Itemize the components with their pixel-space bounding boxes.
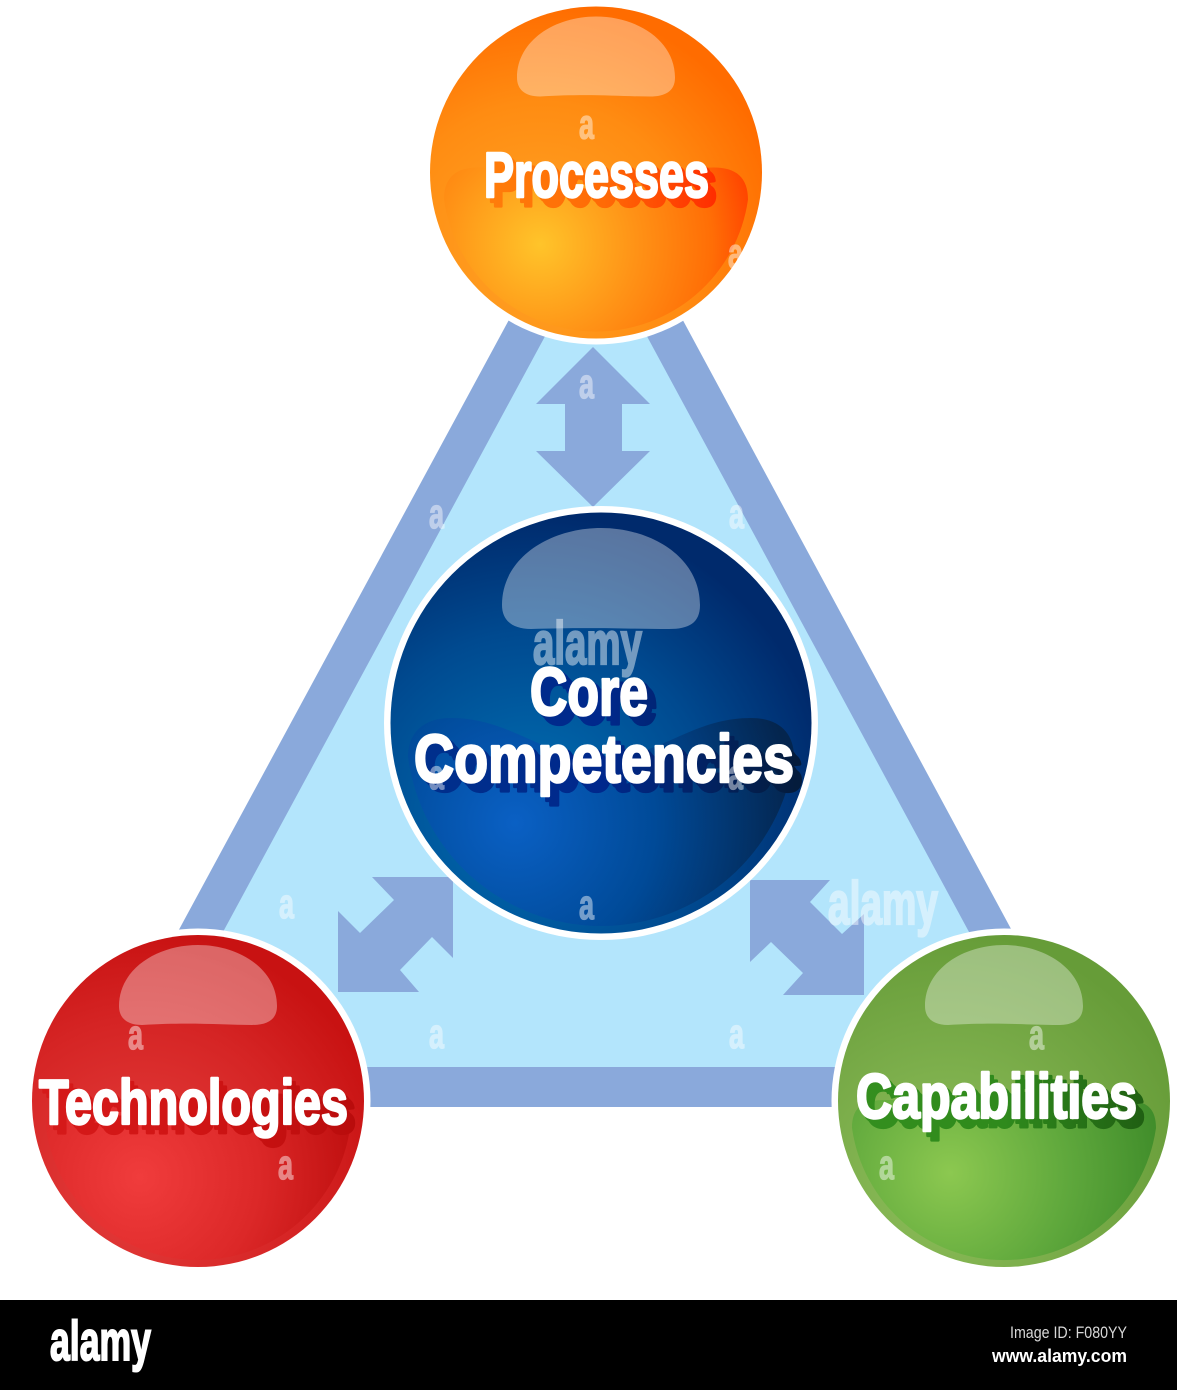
watermarks on triangle: a bbox=[429, 1010, 444, 1057]
footer bar: Image ID: F080YY bbox=[1010, 1323, 1127, 1342]
circle: core competencies: alamy bbox=[533, 610, 642, 677]
footer bar bbox=[0, 1300, 1177, 1390]
watermarks on triangle: alamy bbox=[828, 870, 938, 937]
watermarks on triangle: a bbox=[729, 1010, 744, 1057]
circle: technologies: a bbox=[128, 1011, 143, 1058]
heading: processes: Processes bbox=[488, 144, 713, 216]
circle: core competencies: a bbox=[579, 881, 594, 928]
heading: processes: Processes bbox=[484, 139, 709, 211]
heading: technologies: Technologies bbox=[39, 1068, 348, 1138]
watermarks on triangle: a bbox=[279, 880, 294, 927]
circle: technologies: a bbox=[278, 1141, 293, 1188]
arrow: processes to core bbox=[536, 347, 650, 507]
footer bar: alamy bbox=[50, 1309, 151, 1372]
footer bar: www.alamy.com bbox=[991, 1346, 1127, 1366]
watermarks on triangle: a bbox=[429, 490, 444, 537]
heading: core competencies: Core bbox=[530, 654, 648, 730]
circle: capabilities: a bbox=[879, 1141, 894, 1188]
arrow: capabilities to core bbox=[750, 880, 864, 995]
heading: core competencies bbox=[414, 654, 803, 806]
heading: core competencies: Competencies bbox=[414, 721, 794, 797]
heading: core competencies: Core bbox=[535, 658, 653, 734]
heading: processes bbox=[484, 139, 717, 220]
heading: core competencies: a bbox=[728, 751, 743, 798]
heading: technologies: Technologies bbox=[43, 1072, 352, 1142]
watermarks on triangle: a bbox=[579, 360, 594, 407]
triangle frame bbox=[83, 159, 1107, 1107]
watermarks on triangle: a bbox=[729, 490, 744, 537]
circle: processes: a bbox=[579, 100, 594, 148]
arrow: technologies to core bbox=[338, 877, 453, 992]
heading: core competencies: Competencies bbox=[419, 726, 799, 802]
heading: core competencies: a bbox=[429, 751, 444, 798]
circle: processes bbox=[424, 0, 768, 344]
watermarks on triangle bbox=[279, 360, 938, 1057]
heading: core competencies: Core bbox=[539, 663, 657, 739]
heading: core competencies: Competencies bbox=[423, 730, 803, 806]
circle: core competencies bbox=[384, 506, 818, 940]
circle: capabilities: a bbox=[1029, 1011, 1044, 1058]
circle: capabilities bbox=[832, 928, 1176, 1274]
heading: processes: Processes bbox=[492, 148, 717, 220]
heading: technologies: Technologies bbox=[47, 1077, 356, 1147]
circle: technologies bbox=[26, 928, 370, 1274]
circle: processes: a bbox=[728, 230, 743, 276]
